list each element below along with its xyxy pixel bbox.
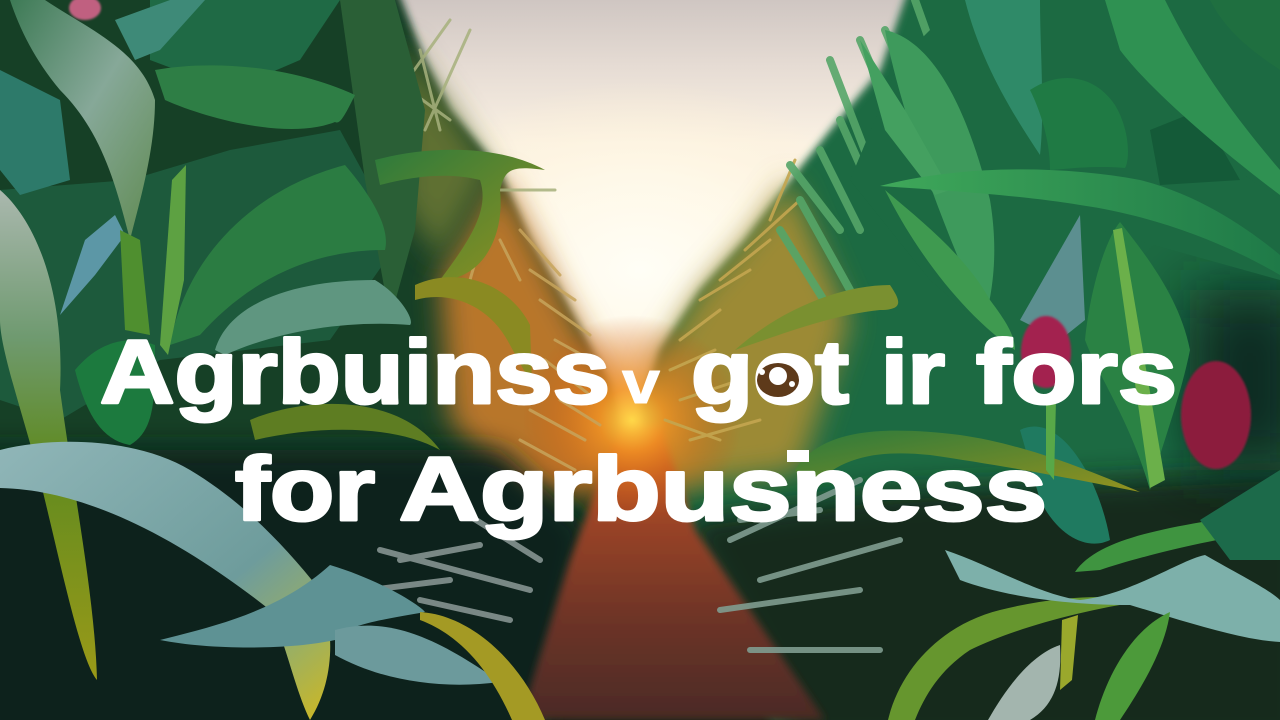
- leaf: olive mid row: [735, 285, 898, 350]
- crop row: left background: [0, 0, 625, 720]
- leaf: green right lower: [1075, 510, 1280, 572]
- lower foliage shading: [0, 290, 1280, 720]
- stem: centre green: [1046, 400, 1056, 480]
- leaf: wide mid right: [1085, 222, 1190, 490]
- title line 1: ir: [881, 323, 945, 423]
- title line 1: Agrbuinss: [100, 323, 610, 423]
- title line 1: fors: [976, 323, 1177, 423]
- tassel spikes: right row: [665, 0, 965, 650]
- leaf: left dark edge: [0, 70, 70, 195]
- leaf: big pale blue sweeping: [0, 442, 330, 720]
- leaf: hanging pale to yellow: [0, 190, 97, 680]
- leaf: teal top: [115, 0, 205, 60]
- leaf: top bright long: [1105, 0, 1280, 195]
- leaf: grey low: [335, 626, 500, 685]
- leaf: olive arc: [415, 277, 532, 385]
- dirt path: [520, 425, 825, 720]
- stalk: yellow curve: [420, 612, 545, 720]
- title line 1: v: [622, 349, 661, 416]
- crop row: right background: [640, 0, 1280, 720]
- stem: light green: [1113, 228, 1165, 488]
- filler: row upper stalks: [340, 0, 425, 320]
- filler: mid left darker foliage: [0, 130, 400, 420]
- leaf: dark right: [1150, 110, 1240, 185]
- flower: crimson small: [1021, 316, 1071, 388]
- leaf: sage middle: [215, 280, 411, 355]
- stalk: green vertical: [120, 230, 150, 335]
- filler: upper right foliage: [850, 0, 1280, 350]
- title: [100, 323, 1177, 540]
- leaf: teal low: [160, 565, 425, 648]
- icon: eye mark inside letter o: [757, 363, 799, 397]
- leaf: green lower: [75, 340, 155, 445]
- leaf: blue-grey back: [1020, 215, 1085, 340]
- flower: crimson large: [1181, 361, 1251, 469]
- leaf: bottom slim green: [1095, 612, 1170, 720]
- leaf: pale bottom tip: [988, 645, 1060, 720]
- title line 1: got: [691, 323, 849, 423]
- leaf: dark teal bottom right: [1200, 470, 1280, 560]
- tassel spikes: left row: [370, 20, 600, 620]
- sun glow at horizon: [522, 315, 742, 525]
- leaf: top corner: [1210, 0, 1280, 70]
- leaf: mid green wide: [170, 165, 386, 345]
- stem: bottom yellow: [1060, 615, 1078, 690]
- leaf: horizontal olive-green: [795, 431, 1140, 492]
- leaf: arching olive: [375, 150, 545, 280]
- leaf: pale blue bottom: [945, 550, 1280, 642]
- stalk: slim: [160, 165, 186, 355]
- leaf: spiky upper: [885, 30, 994, 320]
- title line 2: [235, 440, 1047, 540]
- leaf: big top pale: [10, 0, 155, 240]
- title line 2: Agrbusness: [399, 440, 1047, 540]
- foliage: left plants: [0, 0, 545, 720]
- leaf: lower olive sweep: [250, 404, 440, 450]
- leaf: teal lower middle: [1020, 427, 1110, 544]
- foliage: right plants: [735, 0, 1280, 720]
- leaf: diagonal green: [885, 190, 1015, 350]
- small pink flower top left: [69, 0, 101, 20]
- leaf: dark green block: [1030, 78, 1128, 170]
- leaf: spiky slim: [860, 40, 950, 195]
- leaf: dark green back: [150, 0, 340, 90]
- leaf: bright upper: [155, 65, 355, 129]
- sky with sun: [0, 0, 1280, 460]
- leaf: teal stem: [60, 215, 125, 315]
- leaf: yellow-green arch: [888, 597, 1150, 720]
- leaf: long bright arch: [880, 169, 1280, 275]
- title line 1: [100, 323, 1177, 423]
- leaf: teal tall: [965, 0, 1042, 155]
- title line 2: for: [235, 440, 375, 540]
